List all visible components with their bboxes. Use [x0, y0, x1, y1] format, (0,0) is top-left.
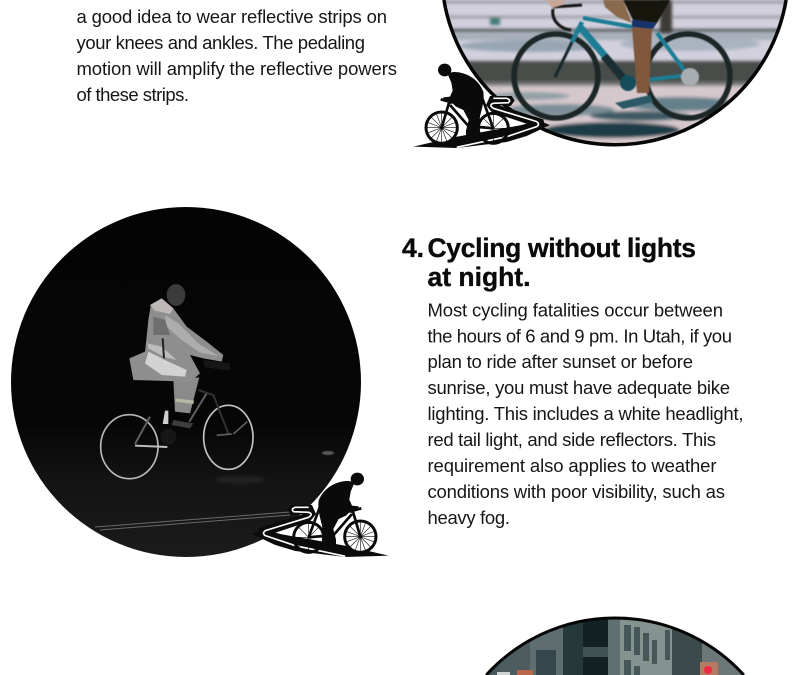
text block: cycling without lights explanation: sunrise, you must have adequate bike: [428, 377, 730, 398]
text block: reflective strips advice: your knees and ankles. The pedaling: [76, 32, 365, 53]
text block: cycling without lights explanation: the hours of 6 and 9 pm. In Utah, if you: [428, 326, 732, 346]
text block: cycling without lights explanation: Most cycling fatalities occur between: [428, 300, 723, 320]
photo: night cyclist with reflective clothing: [11, 207, 361, 557]
icon: cyclist silhouette on winding road (top): [413, 64, 550, 148]
text block: reflective strips advice: of these strips.: [76, 84, 189, 105]
text block: cycling without lights explanation: lighting. This includes a white headlight,: [428, 403, 744, 424]
road markings: [95, 512, 290, 530]
text block: cycling without lights explanation: [428, 300, 744, 528]
rider: [167, 284, 185, 306]
photo: city street with traffic lights: [480, 615, 752, 675]
heading: section 4: [402, 233, 696, 292]
text block: reflective strips advice: a good idea to wear reflective strips on: [76, 6, 387, 27]
photo: cyclist on teal road bike: [440, 0, 790, 150]
text block: cycling without lights explanation: red tail light, and side reflectors. This: [428, 429, 716, 450]
heading: section 4: 4.: [402, 233, 424, 263]
heading: section 4: at night.: [428, 262, 530, 292]
rear wheel: [646, 34, 730, 118]
text block: cycling without lights explanation: plan to ride after sunset or before: [428, 351, 693, 372]
bicycle: [101, 415, 158, 479]
front wheel: [514, 34, 598, 118]
icon: cyclist silhouette on winding road (bottom): [252, 473, 389, 557]
heading: section 4: Cycling without lights: [428, 233, 696, 263]
text block: reflective strips advice: motion will amplify the reflective powers: [76, 58, 397, 79]
text block: reflective strips advice: [76, 6, 397, 105]
text block: cycling without lights explanation: heavy fog.: [428, 507, 510, 528]
text block: cycling without lights explanation: requirement also applies to weather: [428, 455, 716, 476]
text block: cycling without lights explanation: conditions with poor visibility, such as: [428, 481, 725, 502]
